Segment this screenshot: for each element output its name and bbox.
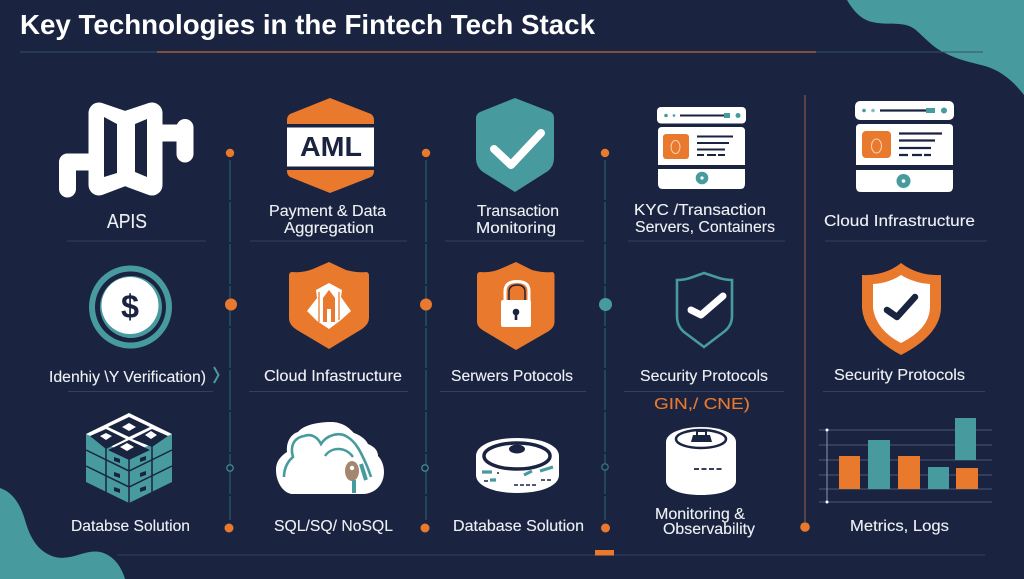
label bbox=[269, 203, 386, 237]
orange marker on bottom rule bbox=[595, 550, 614, 556]
title: Key Technologies in the Fintech Tech Stack bbox=[20, 9, 595, 40]
panel: metrics and logs bbox=[819, 418, 992, 535]
icon: AML hexagon: AML bbox=[300, 131, 362, 162]
icon: teal shield with check bbox=[476, 98, 554, 192]
timeline nodes bbox=[224, 149, 810, 533]
label: KYC /Transaction bbox=[634, 202, 766, 219]
panel: cloud infrastructure top right bbox=[824, 101, 975, 230]
panel: identity verification bbox=[49, 266, 218, 386]
panel: AML payment and data aggregation bbox=[269, 98, 386, 237]
label: SQL/SQ/ NoSQL bbox=[274, 518, 393, 535]
icon: chevron bbox=[214, 367, 218, 383]
panel: servers protocols bbox=[451, 262, 573, 385]
icon: database disk bbox=[476, 438, 559, 493]
label: Security Protocols bbox=[834, 367, 965, 384]
icon: cylinder bbox=[666, 427, 736, 495]
label: Idenhiy \Y Verification) bbox=[49, 369, 206, 386]
icon: outline shield with check bbox=[677, 273, 732, 347]
label: Database Solution bbox=[453, 518, 584, 535]
decorative blob: top right bbox=[847, 0, 1024, 95]
label: Metrics, Logs bbox=[850, 518, 949, 535]
icon: server window bbox=[855, 101, 954, 192]
icon: orange shield with arrows bbox=[289, 262, 369, 349]
label: Databse Solution bbox=[71, 518, 190, 535]
label: Monitoring & bbox=[655, 506, 745, 523]
icon: cloud bbox=[276, 422, 384, 494]
panel: security protocols badge bbox=[834, 263, 965, 384]
panel: transaction monitoring bbox=[476, 98, 559, 237]
label: Transaction bbox=[477, 203, 559, 220]
label: Aggregation bbox=[284, 220, 374, 237]
label: Serwers Potocols bbox=[451, 368, 573, 385]
panel: APIs bbox=[68, 113, 185, 233]
panel: SQL NoSQL bbox=[274, 422, 393, 535]
bar chart bbox=[819, 418, 992, 504]
label bbox=[655, 506, 755, 538]
label: APIS bbox=[107, 211, 147, 233]
panel: cloud infrastructure bbox=[264, 262, 402, 385]
panel: security protocols outline bbox=[640, 273, 768, 385]
label: Security Protocols bbox=[640, 368, 768, 385]
label: Servers, Containers bbox=[635, 219, 775, 236]
panel: monitoring and observability bbox=[655, 427, 755, 538]
label bbox=[634, 202, 775, 236]
icon: isometric cube bbox=[86, 413, 172, 503]
label: Monitoring bbox=[476, 220, 556, 237]
orange annotation text: GIN,/ CNE) bbox=[654, 396, 750, 413]
label: Observability bbox=[663, 521, 755, 538]
icon: dollar coin bbox=[89, 266, 172, 348]
icon: API connector bbox=[68, 113, 185, 189]
panel: database solution cube bbox=[71, 413, 190, 535]
icon: dollar coin: $ bbox=[121, 288, 139, 325]
label: Cloud Infastructure bbox=[264, 368, 402, 385]
panel: database solution disk bbox=[453, 438, 584, 535]
panel: KYC servers and containers bbox=[634, 107, 775, 236]
label: Cloud Infrastructure bbox=[824, 213, 975, 230]
decorative blob: bottom left bbox=[0, 488, 125, 579]
label: Payment & Data bbox=[269, 203, 386, 220]
icon: orange and white shield bbox=[862, 263, 941, 355]
icon: orange shield with padlock bbox=[477, 262, 554, 350]
label bbox=[476, 203, 559, 237]
icon: server window bbox=[657, 107, 746, 189]
